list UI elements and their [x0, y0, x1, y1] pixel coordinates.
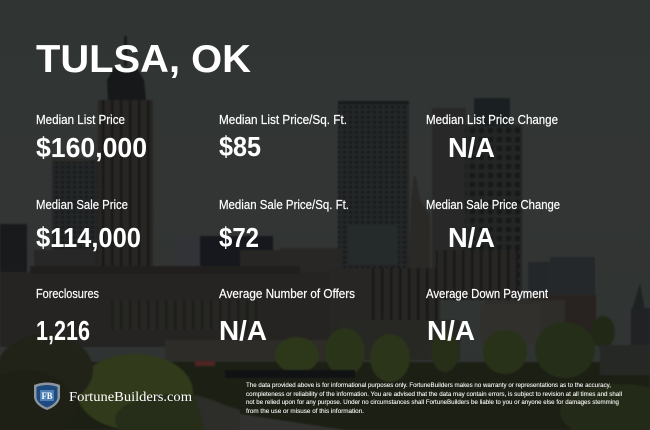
stat: foreclosures: 1,216	[36, 315, 90, 346]
right tall tower	[432, 108, 466, 298]
logo: FortuneBuilders	[34, 382, 192, 410]
stat: median sale price per sq ft: $72	[219, 222, 259, 253]
stat: median sale price change: N/A	[448, 222, 495, 253]
disclaimer: from the use or misuse of this information.	[246, 408, 364, 415]
central tower	[338, 102, 409, 282]
stat: average number of offers	[219, 287, 355, 346]
stat: median sale price per sq ft: Median Sale Price/Sq. Ft.	[219, 198, 349, 212]
stat: median list price	[36, 113, 147, 163]
stat: median list price per sq ft: Median List Price/Sq. Ft.	[219, 113, 347, 127]
stat: median list price: $160,000	[36, 132, 147, 163]
left block building	[52, 160, 98, 270]
trees and ground	[0, 362, 650, 430]
stat: median sale price: $114,000	[36, 222, 141, 253]
stat: average down payment: N/A	[427, 315, 475, 346]
stat: average down payment: Average Down Payment	[426, 287, 548, 301]
stat: average down payment	[426, 287, 548, 346]
small spire	[408, 176, 430, 290]
stat: median sale price per sq ft	[219, 198, 349, 253]
stat: average number of offers: Average Number of Offers	[219, 287, 355, 301]
icon: shield	[34, 382, 60, 410]
stat: median sale price change	[426, 198, 560, 253]
foreground art deco wide building	[0, 272, 330, 347]
disclaimer: The data provided above is for informational purposes only. FortuneBuilders makes no warranty or representations as to the accuracy,	[246, 382, 611, 389]
stat: average number of offers: N/A	[219, 315, 267, 346]
disclaimer: completeness or reliability of the information. You are advised that the data may contain errors, is subject to revision at all times and shall	[246, 391, 623, 398]
stat: median list price per sq ft	[219, 113, 347, 162]
disclaimer: not be relied upon for any purpose. Under no circumstances shall FortuneBuilders be liable to you or anyone else for damages stemming	[246, 399, 619, 406]
logo: FortuneBuilders: FortuneBuilders.com	[69, 390, 192, 405]
stat: median list price change	[426, 113, 558, 163]
stat: median sale price	[36, 198, 141, 253]
left low block	[0, 224, 27, 274]
icon: shield: FB	[42, 391, 52, 401]
disclaimer	[246, 382, 623, 415]
stat: foreclosures	[36, 287, 99, 346]
stat: foreclosures: Foreclosures	[36, 287, 99, 301]
stat: median list price change: Median List Price Change	[426, 113, 558, 127]
main art deco tower	[98, 36, 153, 275]
stat: median list price per sq ft: $85	[219, 131, 261, 162]
stat: median sale price: Median Sale Price	[36, 198, 128, 212]
stat: median list price change: N/A	[448, 132, 495, 163]
right low buildings	[528, 262, 583, 302]
title: TULSA, OK	[36, 38, 251, 81]
stat: median list price: Median List Price	[36, 113, 125, 127]
mid-ground buildings	[178, 236, 210, 266]
stat: median sale price change: Median Sale Price Change	[426, 198, 560, 212]
church spire	[632, 283, 645, 310]
